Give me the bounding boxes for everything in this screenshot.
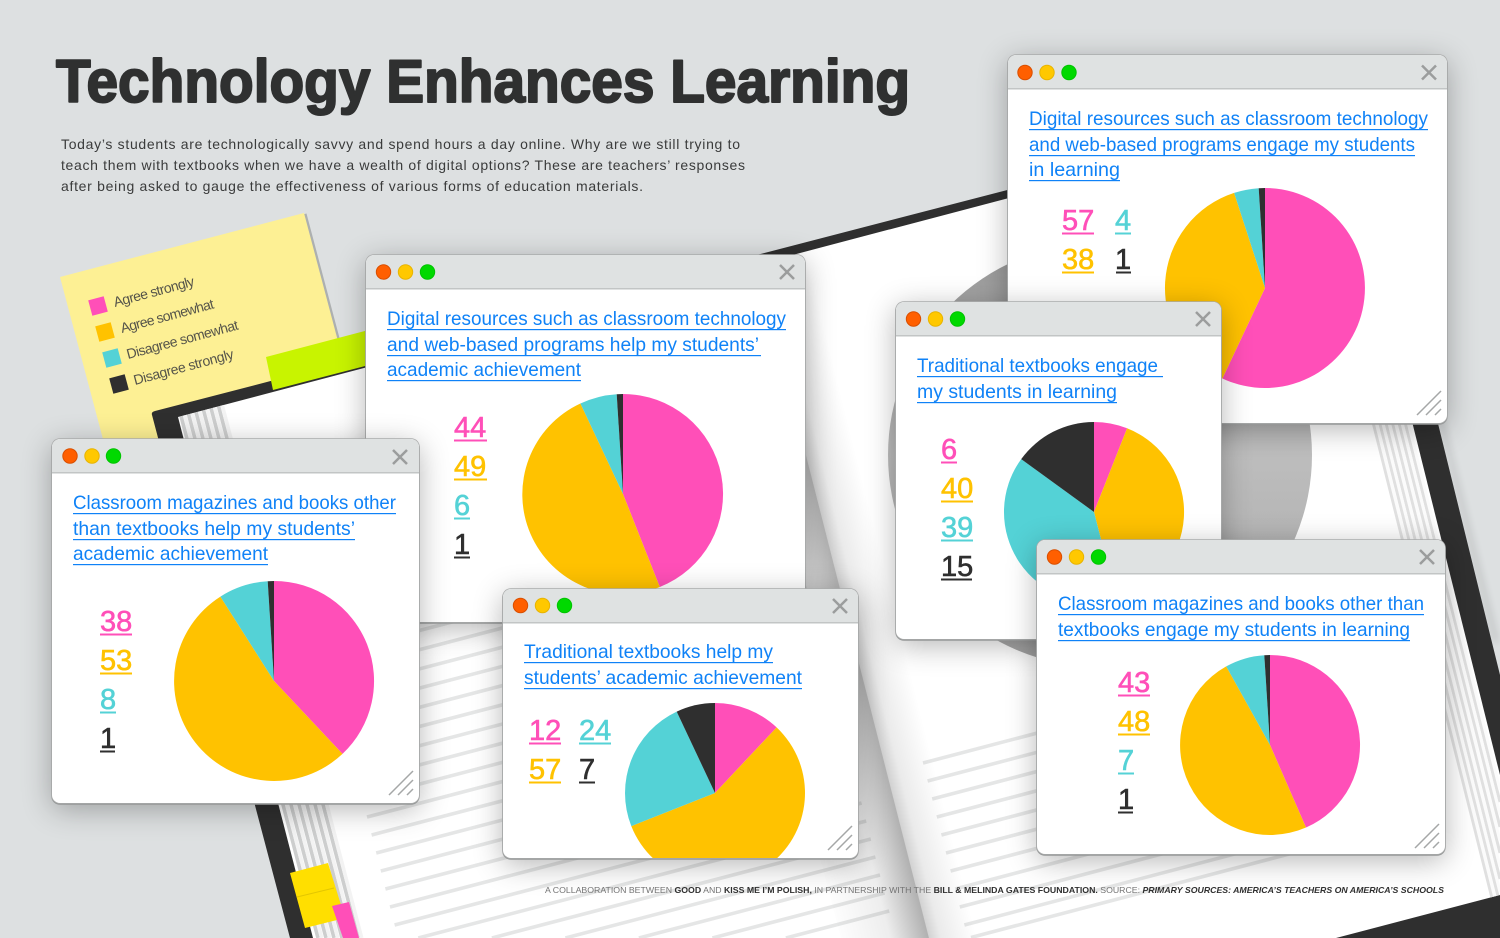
numbers: 7 bbox=[579, 754, 595, 786]
heading bbox=[1058, 593, 1424, 641]
resize grip bbox=[1415, 824, 1439, 848]
pie chart bbox=[522, 394, 723, 594]
intro paragraph: Today’s students are technologically savvy and spend hours a day online. Why are we still trying to bbox=[61, 136, 740, 152]
numbers: 38 bbox=[100, 606, 132, 638]
numbers: 1 bbox=[100, 723, 116, 755]
numbers: 12 bbox=[529, 715, 561, 747]
credits footer: A COLLABORATION BETWEEN GOOD AND KISS ME I’M POLISH, IN PARTNERSHIP WITH THE BILL & MELINDA GATES FOUNDATION. SOURCE: PRIMARY SOURCES: AMERICA’S TEACHERS ON AMERICA’S SCHOOLS bbox=[545, 885, 1444, 895]
legend: agree strongly bbox=[88, 273, 196, 316]
pie chart bbox=[625, 703, 805, 883]
heading: Digital resources such as classroom technology bbox=[387, 308, 786, 330]
pink page tab bbox=[332, 902, 359, 938]
numbers: 44 bbox=[454, 412, 486, 444]
intro paragraph: teach them with textbooks when we have a wealth of digital options? These are teachers’ responses bbox=[61, 157, 745, 173]
yellow page tab bbox=[290, 863, 345, 928]
left page edge stack bbox=[181, 405, 362, 938]
numbers: 7 bbox=[1118, 745, 1134, 777]
heading bbox=[1029, 108, 1428, 181]
heading: academic achievement bbox=[387, 359, 582, 381]
numbers: 24 bbox=[579, 715, 611, 747]
numbers: 49 bbox=[454, 451, 486, 483]
numbers: 40 bbox=[941, 473, 973, 505]
numbers: 8 bbox=[100, 684, 116, 716]
heading: Digital resources such as classroom technology bbox=[1029, 108, 1428, 130]
resize grip bbox=[1417, 391, 1441, 415]
heading bbox=[387, 308, 786, 381]
panel: digital resources achievement bbox=[366, 255, 805, 622]
legend: agree strongly: Agree strongly bbox=[112, 273, 196, 310]
numbers: 1 bbox=[1118, 784, 1134, 816]
numbers: 57 bbox=[529, 754, 561, 786]
numbers bbox=[100, 606, 132, 755]
numbers: 38 bbox=[1062, 244, 1094, 276]
heading: academic achievement bbox=[73, 543, 269, 565]
grey circle on book page bbox=[888, 243, 1312, 667]
heading: Classroom magazines and books other bbox=[73, 492, 396, 514]
window title bar bbox=[503, 589, 858, 624]
numbers bbox=[454, 412, 487, 561]
panel: traditional textbooks engage bbox=[896, 302, 1221, 639]
window title bar bbox=[366, 255, 805, 290]
resize grip bbox=[389, 771, 413, 795]
numbers bbox=[529, 715, 611, 786]
heading: than textbooks help my students’ bbox=[73, 518, 355, 540]
numbers: 6 bbox=[941, 434, 957, 466]
heading bbox=[73, 492, 396, 565]
panel: traditional textbooks achievement bbox=[503, 589, 858, 858]
numbers: 53 bbox=[100, 645, 132, 677]
panel: magazines and books engage bbox=[1037, 540, 1445, 854]
right page edge stack bbox=[1372, 424, 1500, 898]
heading: Traditional textbooks help my bbox=[524, 641, 773, 663]
numbers bbox=[1062, 205, 1131, 276]
heading bbox=[917, 355, 1163, 403]
pie chart bbox=[1004, 422, 1184, 602]
heading: Classroom magazines and books other than bbox=[1058, 593, 1424, 615]
heading: Traditional textbooks engage bbox=[917, 355, 1158, 377]
numbers: 4 bbox=[1115, 205, 1131, 237]
window title bar bbox=[1037, 540, 1445, 574]
numbers bbox=[941, 434, 973, 583]
heading: in learning bbox=[1029, 159, 1120, 181]
title: Technology Enhances Learning bbox=[56, 48, 910, 115]
numbers: 57 bbox=[1062, 205, 1094, 237]
lime tape bbox=[266, 327, 388, 390]
window title bar bbox=[1008, 55, 1447, 90]
numbers: 43 bbox=[1118, 667, 1150, 699]
legend: disagree somewhat: Disagree somewhat bbox=[125, 317, 240, 362]
text lines on left page bbox=[366, 586, 890, 938]
numbers: 1 bbox=[454, 529, 470, 561]
pie chart bbox=[1180, 655, 1360, 835]
heading: students’ academic achievement bbox=[524, 667, 803, 689]
pie chart bbox=[1165, 188, 1365, 388]
numbers: 39 bbox=[941, 512, 973, 544]
numbers: 48 bbox=[1118, 706, 1150, 738]
text lines on right page bbox=[922, 732, 1289, 938]
heading: textbooks engage my students in learning bbox=[1058, 619, 1410, 641]
heading bbox=[524, 641, 803, 689]
legend: disagree strongly: Disagree strongly bbox=[132, 346, 235, 388]
book pages bbox=[178, 112, 1500, 938]
book gutter shading bbox=[806, 322, 962, 938]
window title bar bbox=[52, 439, 419, 474]
intro paragraph: after being asked to gauge the effectiveness of various forms of education materials. bbox=[61, 178, 643, 194]
heading: and web-based programs engage my students bbox=[1029, 134, 1415, 156]
open book bbox=[152, 190, 1500, 938]
numbers bbox=[1118, 667, 1150, 816]
window title bar bbox=[896, 302, 1221, 336]
heading: my students in learning bbox=[917, 381, 1117, 403]
sticky note legend bbox=[60, 213, 364, 492]
panel: magazines and books achievement bbox=[52, 439, 419, 803]
panel: digital resources engage bbox=[1008, 55, 1447, 423]
pie chart bbox=[174, 581, 374, 781]
resize grip bbox=[828, 826, 852, 850]
intro paragraph bbox=[61, 136, 745, 194]
numbers: 6 bbox=[454, 490, 470, 522]
numbers: 1 bbox=[1115, 244, 1131, 276]
legend: agree somewhat: Agree somewhat bbox=[119, 296, 216, 336]
numbers: 15 bbox=[941, 551, 973, 583]
heading: and web-based programs help my students’ bbox=[387, 334, 759, 356]
